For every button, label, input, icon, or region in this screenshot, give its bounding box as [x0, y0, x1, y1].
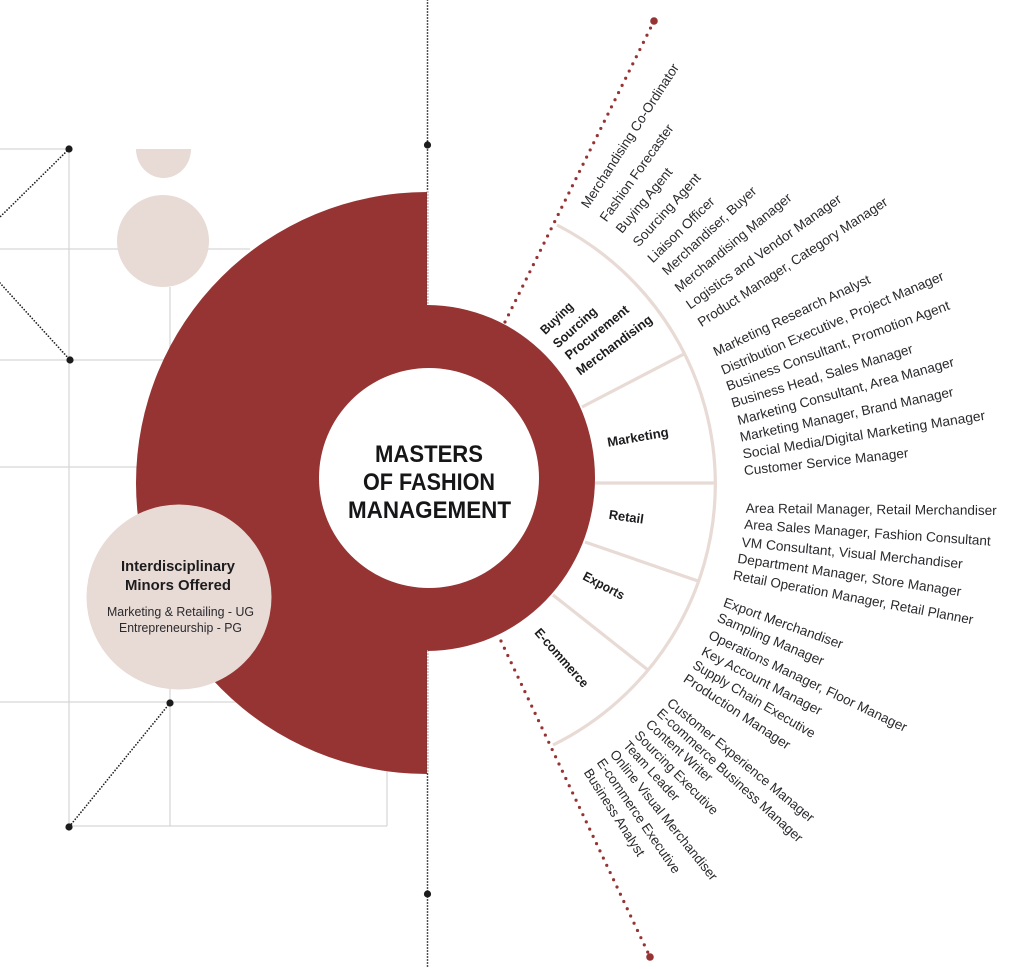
job list: retail: Department Manager, Store Manager — [737, 551, 963, 599]
category labels: Exports — [580, 568, 627, 603]
panel: minors circle: Entrepreneurship - PG — [119, 621, 242, 635]
title: MANAGEMENT — [348, 497, 511, 524]
job list: buying and merchandising: Fashion Forecaster — [597, 121, 677, 224]
title — [348, 441, 511, 524]
job list: marketing: Marketing Research Analyst — [711, 272, 873, 359]
job list: retail — [732, 501, 997, 627]
category labels: Procurement — [562, 301, 632, 363]
job list: retail: Area Retail Manager, Retail Merchandiser — [746, 501, 997, 518]
category labels: Buying — [537, 299, 576, 337]
vertical dotted axis — [424, 0, 431, 969]
job list: e-commerce: Team Leader — [620, 738, 683, 804]
job list: buying and merchandising: Sourcing Agent — [630, 170, 704, 250]
job list: exports: Operations Manager, Floor Manager — [706, 627, 910, 735]
title: MASTERS — [375, 441, 483, 468]
job list: buying and merchandising: Merchandising Manager — [672, 190, 795, 295]
job list: exports: Supply Chain Executive — [690, 657, 818, 741]
red half disc — [136, 192, 427, 774]
job list: e-commerce: Business Analyst — [581, 766, 648, 859]
job list: marketing: Distribution Executive, Project Manager — [719, 268, 946, 378]
fan outer arc and dividers — [553, 225, 717, 745]
job list: marketing: Marketing Manager, Brand Manager — [738, 384, 955, 445]
grid node dots — [65, 145, 174, 831]
center white circle — [319, 368, 539, 588]
job list: buying and merchandising: Merchandiser, Buyer — [659, 183, 760, 278]
job list: buying and merchandising: Product Manager, Category Manager — [695, 194, 891, 330]
job list: e-commerce: E-commerce Executive — [594, 756, 684, 876]
panel: minors circle: Interdisciplinary — [121, 559, 236, 575]
job list: e-commerce: Online Visual Merchandiser — [607, 747, 721, 884]
job list: retail: VM Consultant, Visual Merchandiser — [741, 535, 964, 571]
panel: minors circle: Marketing & Retailing - UG — [107, 605, 254, 619]
job list: buying and merchandising — [578, 60, 891, 330]
category labels — [532, 299, 670, 690]
job list: marketing: Marketing Consultant, Area Manager — [736, 354, 956, 428]
job list: exports: Sampling Manager — [715, 610, 827, 669]
panel: minors circle: Minors Offered — [125, 578, 231, 594]
category labels: Marketing — [606, 424, 670, 450]
job list: e-commerce: Customer Experience Manager — [664, 695, 818, 825]
dotted red boundary top — [505, 17, 658, 322]
job list: e-commerce: Content Writer — [643, 716, 716, 785]
dotted red boundary bottom — [501, 641, 654, 961]
job list: marketing: Business Head, Sales Manager — [730, 341, 915, 410]
red ring right half — [427, 305, 595, 651]
job list: e-commerce: E-commerce Business Manager — [654, 705, 806, 846]
category labels: Merchandising — [573, 312, 655, 378]
title: OF FASHION — [363, 469, 495, 496]
job list: marketing: Customer Service Manager — [743, 445, 910, 478]
panel: minors circle — [86, 504, 272, 690]
job list: buying and merchandising: Logistics and Vendor Manager — [683, 191, 845, 312]
job list: retail: Retail Operation Manager, Retail Planner — [732, 568, 975, 627]
job list: marketing — [711, 268, 987, 478]
job list: exports — [681, 595, 910, 753]
job list: exports: Key Account Manager — [699, 644, 825, 718]
job list: exports: Export Merchandiser — [721, 595, 846, 652]
category labels: E-commerce — [532, 625, 592, 690]
job list: buying and merchandising: Merchandising Co-Ordinator — [578, 60, 682, 211]
category labels: Sourcing — [550, 304, 600, 351]
job list: e-commerce — [581, 695, 818, 884]
job list: exports: Production Manager — [681, 671, 794, 753]
job list: buying and merchandising: Buying Agent — [613, 165, 676, 236]
job list: buying and merchandising: Liaison Officer — [644, 193, 718, 266]
job list: retail: Area Sales Manager, Fashion Consultant — [744, 517, 991, 549]
job list: marketing: Business Consultant, Promotion Agent — [724, 298, 952, 394]
icon: pink circle — [117, 195, 209, 287]
dotted diagonal connectors — [0, 149, 170, 827]
job list: marketing: Social Media/Digital Marketing Manager — [742, 408, 987, 461]
job list: e-commerce: Sourcing Executive — [632, 728, 721, 818]
icon: pink half circle — [136, 149, 191, 178]
category labels: Retail — [608, 507, 645, 527]
